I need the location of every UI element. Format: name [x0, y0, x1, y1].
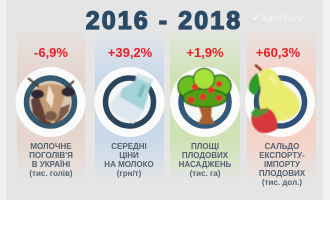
icon: pear and strawberry: [245, 65, 315, 137]
label: fruit: ПЛОДОВИХ: [259, 169, 305, 178]
panel: cow: [17, 32, 85, 182]
label: orchard: НАСАДЖЕНЬ: [179, 160, 231, 169]
label: fruit: [259, 142, 305, 187]
value: orchard: +1,9%: [186, 45, 224, 60]
icon: cow: [16, 67, 86, 137]
panel: milk: [95, 32, 164, 182]
label: milk: [104, 142, 154, 178]
value: fruit: +60,3%: [256, 45, 300, 60]
label: fruit: САЛЬДО: [265, 142, 299, 151]
label: orchard: [179, 142, 232, 178]
label: milk: НА МОЛОКО: [104, 160, 154, 169]
label: cow: (тис. голів): [29, 169, 73, 178]
label: milk: ЦІНИ: [119, 151, 139, 160]
icon: milk bottle: [94, 67, 164, 137]
panel: orchard: [170, 32, 240, 182]
label: fruit: ЕКСПОРТУ-: [259, 151, 305, 160]
label: milk: СЕРЕДНІ: [111, 142, 147, 151]
label: cow: В УКРАЇНІ: [32, 160, 70, 169]
label: fruit: (тис. дол.): [262, 178, 302, 187]
label: orchard: ПЛОЩІ: [191, 142, 219, 151]
label: cow: [29, 142, 73, 178]
label: milk: (грн/т): [117, 169, 141, 178]
value: cow: -6,9%: [34, 45, 68, 60]
title: 2016 - 2018: [86, 7, 242, 35]
label: orchard: (тис. га): [190, 169, 220, 178]
logo: AgroView: ✔AgroView: [252, 14, 304, 24]
icon: apple tree: [170, 67, 240, 137]
panel: fruit: [247, 32, 316, 182]
value: milk: +39,2%: [108, 45, 152, 60]
label: fruit: ІМПОРТУ: [264, 160, 300, 169]
label: orchard: ПЛОДОВИХ: [182, 151, 228, 160]
label: cow: МОЛОЧНЕ: [30, 142, 72, 151]
label: cow: ПОГОЛІВ'Я: [29, 151, 73, 160]
